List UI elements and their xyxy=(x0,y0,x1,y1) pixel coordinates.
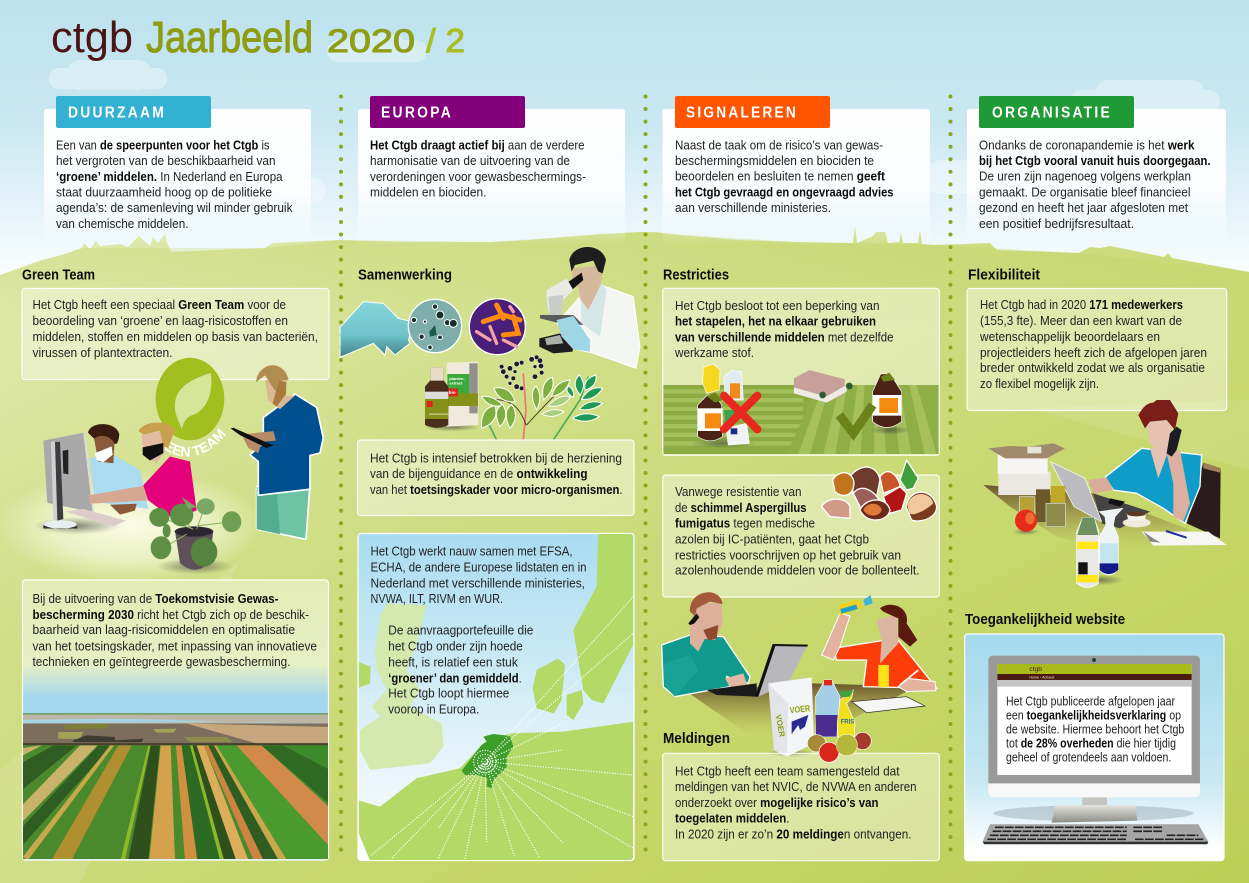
text: flexibiliteit: zo flexibel mogelijk zijn. xyxy=(980,376,1099,391)
icon: gray bottle and spray bottle xyxy=(1077,508,1123,587)
text: bijenguidance xyxy=(370,450,622,497)
illustration: meldingen people and products xyxy=(662,592,937,762)
dotted column dividers xyxy=(341,96,950,861)
illustration: standing man with tablet xyxy=(231,365,323,539)
text: flexibiliteit xyxy=(979,297,1207,391)
text: meldingen: onderzoekt over mogelijke risico’s van xyxy=(675,795,879,810)
icon: cardboard boxes xyxy=(988,443,1065,495)
heading: flexibiliteit: Flexibiliteit xyxy=(968,268,1040,284)
icon: feed bag: VOER xyxy=(789,703,811,715)
map: europe with dotted rays from the Netherlands xyxy=(357,533,634,861)
text: signaleren intro: beoordelen en besluiten te nemen geeft xyxy=(675,168,886,184)
text: organisatie intro: gezond en heeft het jaar afgesloten met xyxy=(979,200,1188,215)
text: green team: middelen, stoffen en middelen op basis van bacteriën, xyxy=(32,329,318,344)
text: aspergillus: de schimmel Aspergillus xyxy=(675,500,806,515)
title: 2020 xyxy=(327,23,415,59)
illustration: desktop computer: ctgb xyxy=(1029,666,1042,673)
text: restricties: Het Ctgb besloot tot een beperking van xyxy=(675,298,880,313)
illustration: chair xyxy=(1187,463,1221,538)
text: bijenguidance: van de bijenguidance en de ontwikkeling xyxy=(370,466,588,481)
illustration: potted plant xyxy=(149,497,241,574)
icon: petri dish xyxy=(408,299,462,353)
text: organisatie intro: bij het Ctgb vooral vanuit huis doorgegaan. xyxy=(979,153,1210,168)
text: aanvraagportefeuille: het Ctgb onder zijn hoede xyxy=(388,639,523,654)
text: organisatie intro: gemaakt. De organisatie bleef financieel xyxy=(979,184,1191,200)
title: ctgb xyxy=(51,13,133,62)
text: signaleren intro: aan verschillende ministeries. xyxy=(675,200,831,215)
text: flexibiliteit: Het Ctgb had in 2020 171 medewerkers xyxy=(980,297,1183,312)
text: aanvraagportefeuille: heeft, is relatief een stuk xyxy=(388,654,518,669)
illustration: green team at work xyxy=(6,358,324,578)
panel: organisatie xyxy=(967,96,1226,245)
text: aspergillus: azolen bij IC-patiënten, gaat het Ctgb xyxy=(675,531,869,546)
text: aspergillus: Vanwege resistentie van xyxy=(675,484,802,499)
panel: aspergillus xyxy=(663,460,939,597)
illustration: samenwerking lab xyxy=(340,247,640,440)
illustration: scientist with microscope xyxy=(539,247,640,368)
illustration: man on phone with laptop xyxy=(662,592,808,697)
background green hills with skyline xyxy=(0,225,1249,883)
text: duurzaam intro: staat duurzaamheid hoog op de politieke xyxy=(56,184,272,200)
tag: europa: EUROPA xyxy=(381,104,453,122)
text: meldingen: Het Ctgb heeft een team samengesteld dat xyxy=(675,764,900,779)
icon: jars and apple xyxy=(1013,486,1065,535)
text: toegankelijkheid: Het Ctgb publiceerde afgelopen jaar xyxy=(1006,693,1176,708)
illustration: plants with berries xyxy=(481,355,603,440)
icon: blue bottle and spray bottle: FRIS xyxy=(841,719,854,725)
text: restricties: werkzame stof. xyxy=(674,345,754,360)
text: duurzaam intro: Een van de speerpunten voor het Ctgb is xyxy=(56,138,270,152)
icon: green team badge: GREEN TEAM xyxy=(150,428,226,457)
text: signaleren intro: Naast de taak om de risico’s van gewas- xyxy=(675,138,883,152)
text: meldingen xyxy=(675,764,916,842)
text: flexibiliteit: wetenschappelijk beoordelaars en xyxy=(979,329,1160,344)
clouds xyxy=(49,34,1220,204)
text: organisatie intro: De uren zijn nagenoeg volgens werkplan xyxy=(979,168,1191,184)
panel: europa xyxy=(358,96,625,245)
text: aanvraagportefeuille: Het Ctgb loopt hiermee xyxy=(388,686,509,701)
tag: signaleren xyxy=(675,96,830,128)
icon: feed bag xyxy=(767,677,814,757)
heading: toegankelijkheid website: Toegankelijkheid website xyxy=(965,612,1125,628)
tag: organisatie: ORGANISATIE xyxy=(992,104,1112,122)
illustration: woman on phone xyxy=(1088,400,1202,523)
heading: restricties: Restricties xyxy=(663,268,729,284)
panel: bijenguidance xyxy=(358,440,634,516)
panel: restricties xyxy=(663,288,939,455)
text: bijenguidance: Het Ctgb is intensief betrokken bij de herziening xyxy=(370,450,622,466)
text: aspergillus: fumigatus tegen medische xyxy=(675,516,815,531)
text: organisatie intro: Ondanks de coronapandemie is het werk xyxy=(979,138,1195,152)
text: flexibiliteit: (155,3 fte). Meer dan een kwart van de xyxy=(980,313,1182,328)
text: green team xyxy=(32,297,318,360)
text: toekomstvisie: bescherming 2030 richt het Ctgb zich op de beschik- xyxy=(32,607,309,622)
title: Jaarbeeld xyxy=(146,13,313,62)
illustration: computer monitor and keyboard xyxy=(33,433,126,535)
text: samenwerking efsa: ECHA, de andere Europese lidstaten en in xyxy=(370,559,586,574)
text: samenwerking efsa: Nederland met verschillende ministeries, xyxy=(370,575,585,590)
text: aspergillus xyxy=(675,484,920,578)
text: signaleren intro: beschermingsmiddelen en biociden te xyxy=(675,153,874,168)
text: toegankelijkheid: de website. Hiermee behoort het Ctgb xyxy=(1006,721,1184,736)
text: organisatie intro xyxy=(979,138,1210,231)
panel: flexibiliteit xyxy=(967,288,1227,410)
text: toekomstvisie: baarheid van laag-risicomiddelen en optimalisatie xyxy=(32,622,295,637)
text: toekomstvisie: van het toetsingskader, met inpassing van innovatieve xyxy=(32,638,317,654)
tag: duurzaam: DUURZAAM xyxy=(68,104,166,122)
text: toegankelijkheid: tot de 28% overheden die hier tijdig xyxy=(1006,735,1176,750)
illustration: woman drinking from bottle xyxy=(822,595,937,692)
illustration: seated man with mask xyxy=(88,424,148,509)
text: signaleren intro: het Ctgb gevraagd en ongevraagd advies xyxy=(675,184,894,200)
text: duurzaam intro: van chemische middelen. xyxy=(56,216,188,231)
icon: green team badge xyxy=(150,358,226,457)
background sky xyxy=(0,0,1249,283)
panel: toegankelijkheid website xyxy=(965,634,1224,861)
icon: notebook xyxy=(852,697,925,713)
icon: laptop xyxy=(1051,462,1150,528)
text: green team: virussen of plantextracten. xyxy=(32,345,172,360)
text: europa intro: harmonisatie van de uitvoering van de xyxy=(370,153,570,168)
illustration: farmland horizon xyxy=(23,713,328,859)
text: meldingen: In 2020 zijn er zo’n 20 meldingen ontvangen. xyxy=(675,827,912,842)
text: toekomstvisie: Bij de uitvoering van de Toekomstvisie Gewas- xyxy=(32,591,278,606)
text: europa intro: middelen en biociden. xyxy=(370,184,486,200)
text: restricties: van verschillende middelen met dezelfde xyxy=(675,329,894,344)
text: meldingen: meldingen van het NVIC, de NVWA en anderen xyxy=(675,779,916,794)
icon: apples xyxy=(807,732,871,762)
text: duurzaam intro xyxy=(56,138,293,231)
text: europa intro xyxy=(370,138,586,200)
illustration: bottle and box with plant extract: plantenextract xyxy=(429,412,450,416)
text: meldingen: toegelaten middelen. xyxy=(675,811,790,826)
text: toegankelijkheid xyxy=(1006,693,1184,764)
heading: meldingen: Meldingen xyxy=(663,731,730,747)
text: restricties xyxy=(674,298,894,360)
text: toekomstvisie: technieken en geïntegreerde gewasbescherming. xyxy=(32,654,290,669)
tag: organisatie xyxy=(979,96,1134,128)
icon: micro-organisms xyxy=(469,299,525,355)
title: / 2 xyxy=(426,22,465,59)
text: aanvraagportefeuille: voorop in Europa. xyxy=(388,701,479,716)
text: samenwerking efsa: Het Ctgb werkt nauw samen met EFSA, xyxy=(370,544,572,559)
panel: duurzaam xyxy=(44,96,311,245)
text: toegankelijkheid: geheel of grotendeels aan voldoen. xyxy=(1006,749,1171,764)
text: aanvraagportefeuille: ‘groener’ dan gemiddeld. xyxy=(388,670,522,685)
illustration: bottle and box with plant extract xyxy=(423,362,480,431)
text: bijenguidance: van het toetsingskader voor micro-organismen. xyxy=(370,482,622,497)
text: duurzaam intro: het vergroten van de beschikbaarheid van xyxy=(56,153,276,168)
panel: toekomstvisie with farmland xyxy=(22,580,328,860)
text: green team: beoordeling van ‘groene’ en laag-risicostoffen en xyxy=(32,313,288,328)
text: signaleren intro xyxy=(675,138,894,215)
text: flexibiliteit: breder ontwikkeld zodat we als organisatie xyxy=(980,360,1205,375)
text: green team: Het Ctgb heeft een speciaal Green Team voor de xyxy=(32,297,286,312)
tag: signaleren: SIGNALEREN xyxy=(686,104,798,122)
illustration: fields with bottles, cross and check xyxy=(663,364,939,454)
heading: green team: Green Team xyxy=(22,268,95,284)
illustration: desktop computer: Home › Actueel xyxy=(1029,675,1055,679)
illustration: flower bulbs xyxy=(822,460,937,521)
panel: signaleren xyxy=(662,96,930,245)
illustration: woman in pink with mask xyxy=(88,423,197,519)
illustration: bottle and box with plant extract: extract xyxy=(449,380,463,385)
icon: cup and clipboard xyxy=(1123,512,1227,546)
panel: green team xyxy=(22,288,329,380)
illustration: bottle and box with plant extract: bio xyxy=(449,390,456,395)
text: aspergillus: azolenhoudende middelen voor de bollenteelt. xyxy=(675,563,920,578)
tag: europa xyxy=(370,96,525,128)
text: europa intro: Het Ctgb draagt actief bij aan de verdere xyxy=(370,138,584,152)
text: organisatie intro: een positief bedrijfsresultaat. xyxy=(979,216,1134,231)
title xyxy=(51,13,465,62)
icon: feed bag: VOER xyxy=(774,714,787,738)
panel: europe map xyxy=(357,533,634,861)
text: restricties: het stapelen, het na elkaar gebruiken xyxy=(675,314,876,329)
text: samenwerking efsa xyxy=(370,544,586,606)
text: aanvraagportefeuille xyxy=(388,623,533,716)
illustration: bottle and box with plant extract: planten- xyxy=(449,376,465,381)
panel: meldingen xyxy=(663,753,939,861)
text: samenwerking efsa: NVWA, ILT, RIVM en WUR. xyxy=(370,591,503,606)
text: toegankelijkheid: een toegankelijkheidsverklaring op xyxy=(1006,707,1181,722)
tag: duurzaam xyxy=(56,96,211,128)
icon: gloved hand xyxy=(340,302,412,357)
text: duurzaam intro: ‘groene’ middelen. In Nederland en Europa xyxy=(56,169,283,184)
illustration: desktop computer xyxy=(983,656,1208,844)
text: aspergillus: restricties voorschrijven op het gebruik van xyxy=(675,547,901,562)
heading: samenwerking: Samenwerking xyxy=(358,268,452,284)
text: europa intro: verordeningen voor gewasbeschermings- xyxy=(370,169,586,184)
text: toekomstvisie xyxy=(32,591,317,669)
icon: blue bottle and spray bottle xyxy=(816,680,855,743)
apples over meldingen panel xyxy=(819,734,857,762)
text: duurzaam intro: agenda’s: de samenleving wil minder gebruik xyxy=(56,200,293,215)
text: aanvraagportefeuille: De aanvraagportefeuille die xyxy=(388,623,533,638)
text: flexibiliteit: projectleiders heeft zich de afgelopen jaren xyxy=(980,345,1207,360)
illustration: woman working from home xyxy=(983,400,1227,587)
